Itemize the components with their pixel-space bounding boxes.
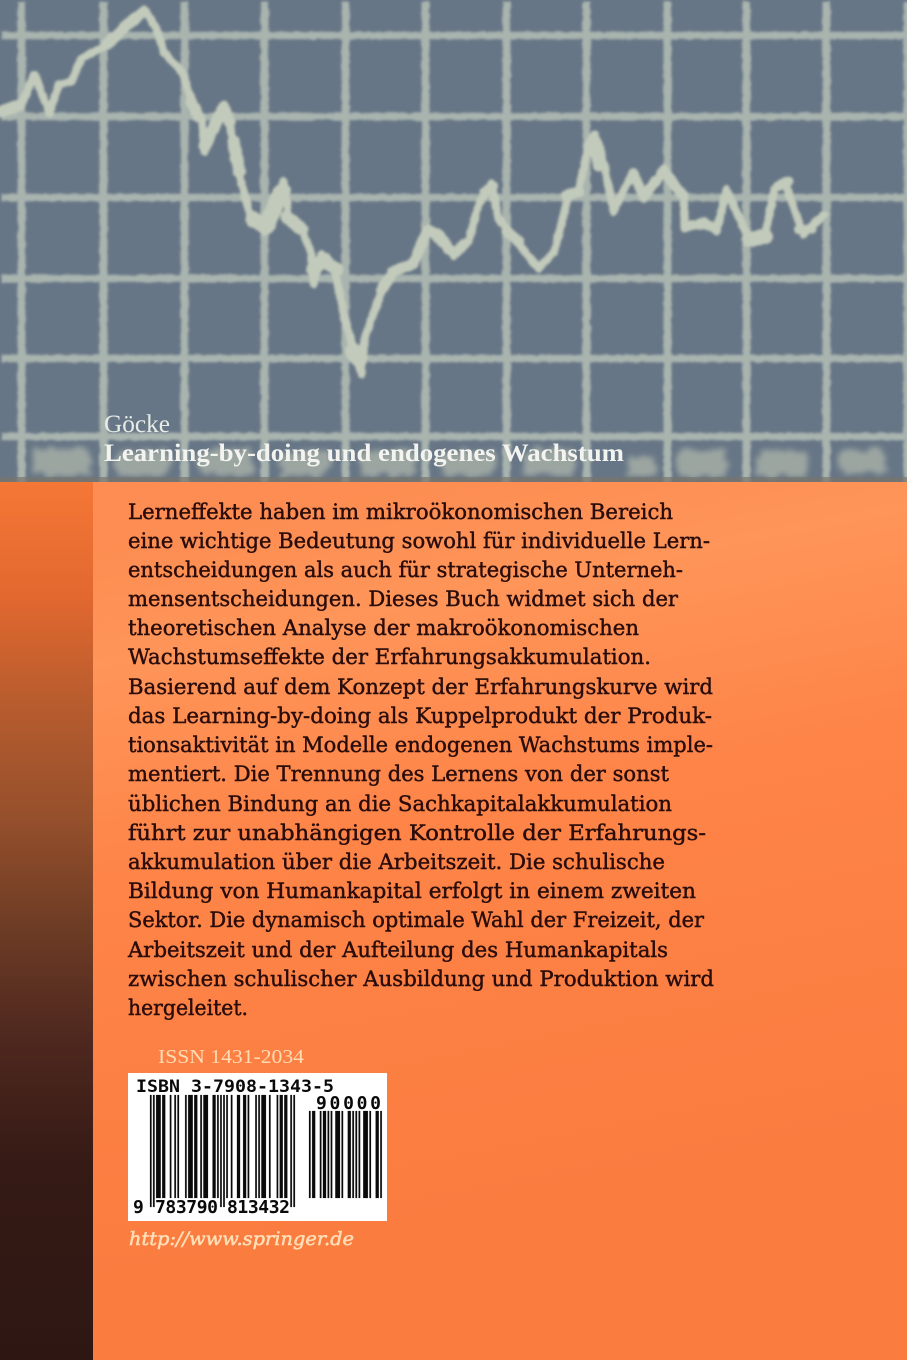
book title: Learning-by-doing und endogenes Wachstum bbox=[104, 440, 624, 467]
add-on number: 90000 bbox=[316, 1093, 381, 1114]
body text block bbox=[127, 500, 714, 1021]
body text block: Wachstumseffekte der Erfahrungsakkumulation. bbox=[128, 645, 651, 670]
EAN digits: 9 bbox=[133, 1197, 144, 1218]
body text block: führt zur unabhängigen Kontrolle der Erfahrungs- bbox=[128, 821, 706, 846]
body text block: Lerneffekte haben im mikroökonomischen Bereich bbox=[128, 500, 673, 525]
body text block: üblichen Bindung an die Sachkapitalakkumulation bbox=[128, 792, 672, 817]
body text block: mensentscheidungen. Dieses Buch widmet sich der bbox=[128, 587, 679, 612]
panel: chart photograph bbox=[0, 0, 907, 484]
EAN main bars bbox=[150, 1095, 295, 1207]
body text block: tionsaktivität in Modelle endogenen Wachstums imple- bbox=[128, 733, 713, 758]
panel: orange text background bbox=[93, 482, 907, 1360]
EAN digits: 813432 bbox=[227, 1197, 290, 1218]
add-on bars bbox=[309, 1111, 382, 1198]
body text block: mentiert. Die Trennung des Lernens von der sonst bbox=[128, 762, 669, 787]
grid and line chart bbox=[2, 2, 907, 484]
EAN digits bbox=[133, 1197, 290, 1218]
body text block: akkumulation über die Arbeitszeit. Die schulische bbox=[128, 850, 665, 875]
body text block: das Learning-by-doing als Kuppelprodukt der Produk- bbox=[128, 704, 712, 729]
ISBN number: ISBN 3-7908-1343-5 bbox=[136, 1077, 334, 1097]
panel: dark gradient side strip bbox=[0, 482, 93, 1360]
ISSN number: ISSN 1431-2034 bbox=[158, 1046, 304, 1068]
blurred axis labels bbox=[33, 448, 886, 477]
body text block: theoretischen Analyse der makroökonomischen bbox=[128, 616, 639, 641]
body text block: Basierend auf dem Konzept der Erfahrungskurve wird bbox=[128, 675, 713, 700]
body text block: eine wichtige Bedeutung sowohl für individuelle Lern- bbox=[128, 529, 710, 554]
publisher website: http://www.springer.de bbox=[129, 1228, 354, 1250]
EAN digits: 783790 bbox=[155, 1197, 218, 1218]
body text block: zwischen schulischer Ausbildung und Produktion wird bbox=[128, 967, 714, 992]
author name: Göcke bbox=[104, 409, 170, 438]
barcode bbox=[128, 1073, 387, 1221]
body text block: hergeleitet. bbox=[128, 996, 248, 1021]
body text block: entscheidungen als auch für strategische Unterneh- bbox=[128, 558, 683, 583]
body text block: Arbeitszeit und der Aufteilung des Humankapitals bbox=[127, 938, 668, 963]
body text block: Sektor. Die dynamisch optimale Wahl der Freizeit, der bbox=[128, 908, 705, 933]
body text block: Bildung von Humankapital erfolgt in einem zweiten bbox=[128, 879, 696, 904]
